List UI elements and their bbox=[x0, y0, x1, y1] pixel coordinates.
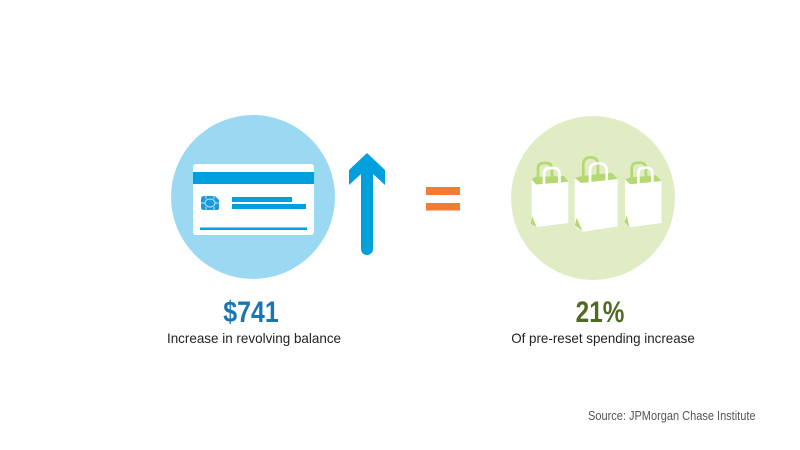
icon: equals sign bbox=[426, 187, 460, 210]
stat: $741: $741 bbox=[224, 296, 279, 329]
caption: of pre-reset spending increase: Of pre-reset spending increase bbox=[511, 330, 695, 346]
icon: up arrow bbox=[349, 153, 385, 255]
icon: shopping bags in green circle bbox=[511, 116, 675, 280]
source note: Source: JPMorgan Chase Institute bbox=[588, 409, 756, 423]
stat: 21%: 21% bbox=[576, 296, 625, 329]
bag 1 bbox=[531, 163, 568, 227]
icon: credit card in blue circle bbox=[171, 115, 335, 279]
caption: increase in revolving balance: Increase in revolving balance bbox=[167, 330, 341, 346]
bag 3 bbox=[624, 163, 662, 227]
bag 2 bbox=[575, 157, 618, 232]
